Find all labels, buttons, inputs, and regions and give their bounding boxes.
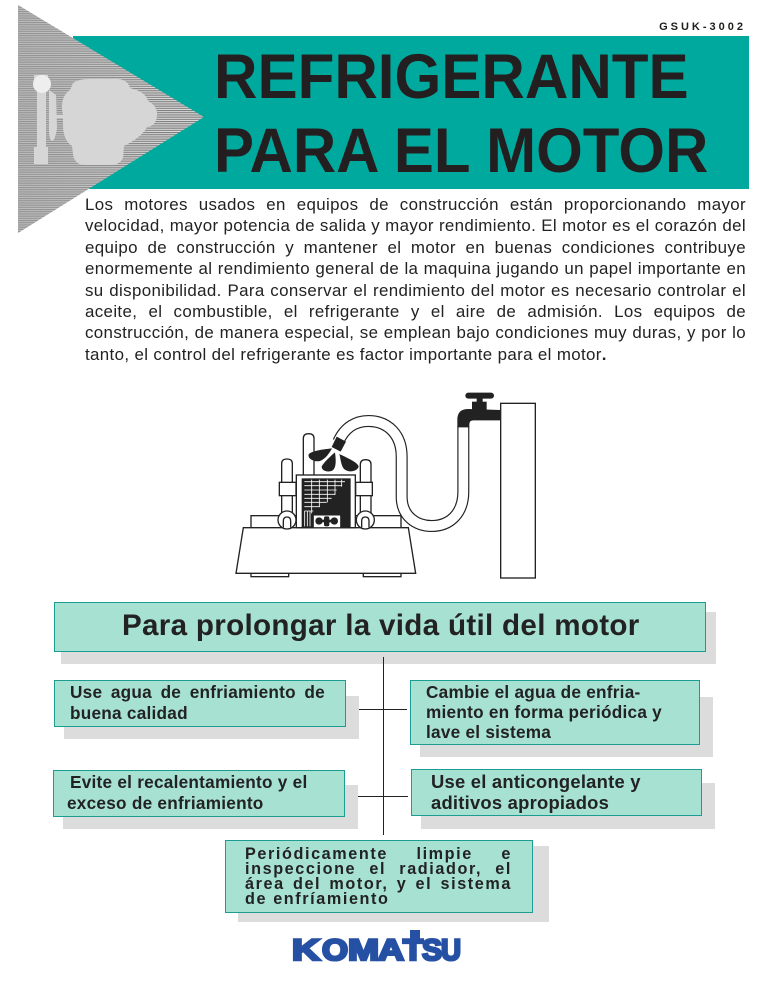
box text: lave el sistema	[426, 722, 551, 742]
connector lines	[358, 657, 408, 835]
intro paragraph: Los motores usados en equipos de construcción están proporcionando mayor	[85, 195, 746, 214]
rear pipe	[303, 434, 314, 475]
hose	[338, 421, 463, 526]
intro paragraph: tanto, el control del refrigerante es factor importante para el motor.	[85, 345, 607, 364]
logo: Komatsu: A	[378, 934, 404, 967]
box text: área del motor, y el sistema	[245, 875, 512, 893]
logo: Komatsu: S	[422, 934, 442, 967]
box text: exceso de enfriamiento	[67, 793, 264, 813]
box text	[53, 770, 345, 817]
box text	[411, 769, 702, 816]
tap	[457, 393, 501, 427]
radiator frame	[296, 475, 355, 528]
logo: Komatsu: U	[441, 934, 461, 967]
intro paragraph: velocidad, mayor potencia de salida y mayor rendimiento. El motor es el corazón del	[85, 216, 746, 235]
shadow	[420, 697, 713, 757]
intro paragraph: construcción, de manera especial, se emplean bajo condiciones muy duras, y por lo	[85, 323, 746, 342]
box text: Cambie el agua de enfria-	[426, 682, 640, 702]
box text: aditivos apropiados	[431, 792, 609, 813]
title line 2: PARA EL MOTOR	[214, 116, 708, 186]
box text: Periódicamente limpie e	[245, 845, 512, 863]
box text: inspeccione el radiador, el	[245, 860, 512, 878]
tank	[501, 403, 535, 578]
box text: Use el anticongelante y	[431, 771, 641, 792]
panel: antifreeze	[411, 769, 715, 829]
panel: periodic water change	[410, 680, 713, 757]
illustration: engine radiator filled from a water tap	[235, 392, 536, 579]
intro paragraph: enormemente al rendimiento general de la maquina jugando un papel importante en	[85, 259, 746, 278]
cap plate	[313, 515, 341, 528]
logo: Komatsu: T	[403, 934, 423, 967]
logo: Komatsu: O	[322, 934, 348, 967]
shadow	[238, 846, 549, 922]
panel: water quality	[54, 680, 359, 739]
panel: overheating	[53, 770, 358, 829]
box text: de enfríamiento	[245, 890, 390, 908]
intro paragraph: su disponibilidad. Para conservar el rendimiento del motor es necesario controlar el	[85, 281, 746, 300]
box text: miento en forma periódica y	[426, 702, 662, 722]
header box with text: Para prolongar la vida útil del motor	[122, 609, 640, 642]
box text: Evite el recalentamiento y el	[70, 772, 307, 792]
shadow	[421, 783, 715, 829]
box text	[410, 680, 700, 745]
panel: periodic cleaning	[225, 840, 549, 922]
panel: main goal header	[54, 602, 716, 664]
header box with text	[54, 602, 706, 652]
logo: Komatsu: M	[348, 934, 379, 967]
box text: buena calidad	[70, 703, 188, 723]
radiator core	[302, 478, 351, 528]
box text	[225, 840, 533, 913]
intro paragraph	[85, 195, 746, 364]
logo: Komatsu: K	[292, 934, 320, 967]
intro paragraph: equipo de construcción y mantener el motor en buenas condiciones contribuye	[85, 238, 746, 257]
header shadow	[61, 612, 716, 664]
side pipes	[282, 459, 292, 517]
base	[251, 516, 401, 529]
icon: striped triangle with engine silhouette	[18, 5, 204, 233]
box text: Use agua de enfriamiento de	[70, 682, 325, 702]
title	[214, 42, 708, 186]
box text	[54, 680, 346, 727]
logo: Komatsu	[292, 930, 461, 967]
intro paragraph: aceite, el combustible, el refrigerante y el aire de admisión. Los equipos de	[85, 302, 746, 321]
water splash	[309, 437, 359, 471]
shadow	[64, 696, 359, 739]
header teal band	[73, 36, 749, 189]
title line 1: REFRIGERANTE	[214, 42, 689, 112]
shadow	[63, 785, 358, 829]
document code: GSUK-3002	[659, 21, 746, 33]
